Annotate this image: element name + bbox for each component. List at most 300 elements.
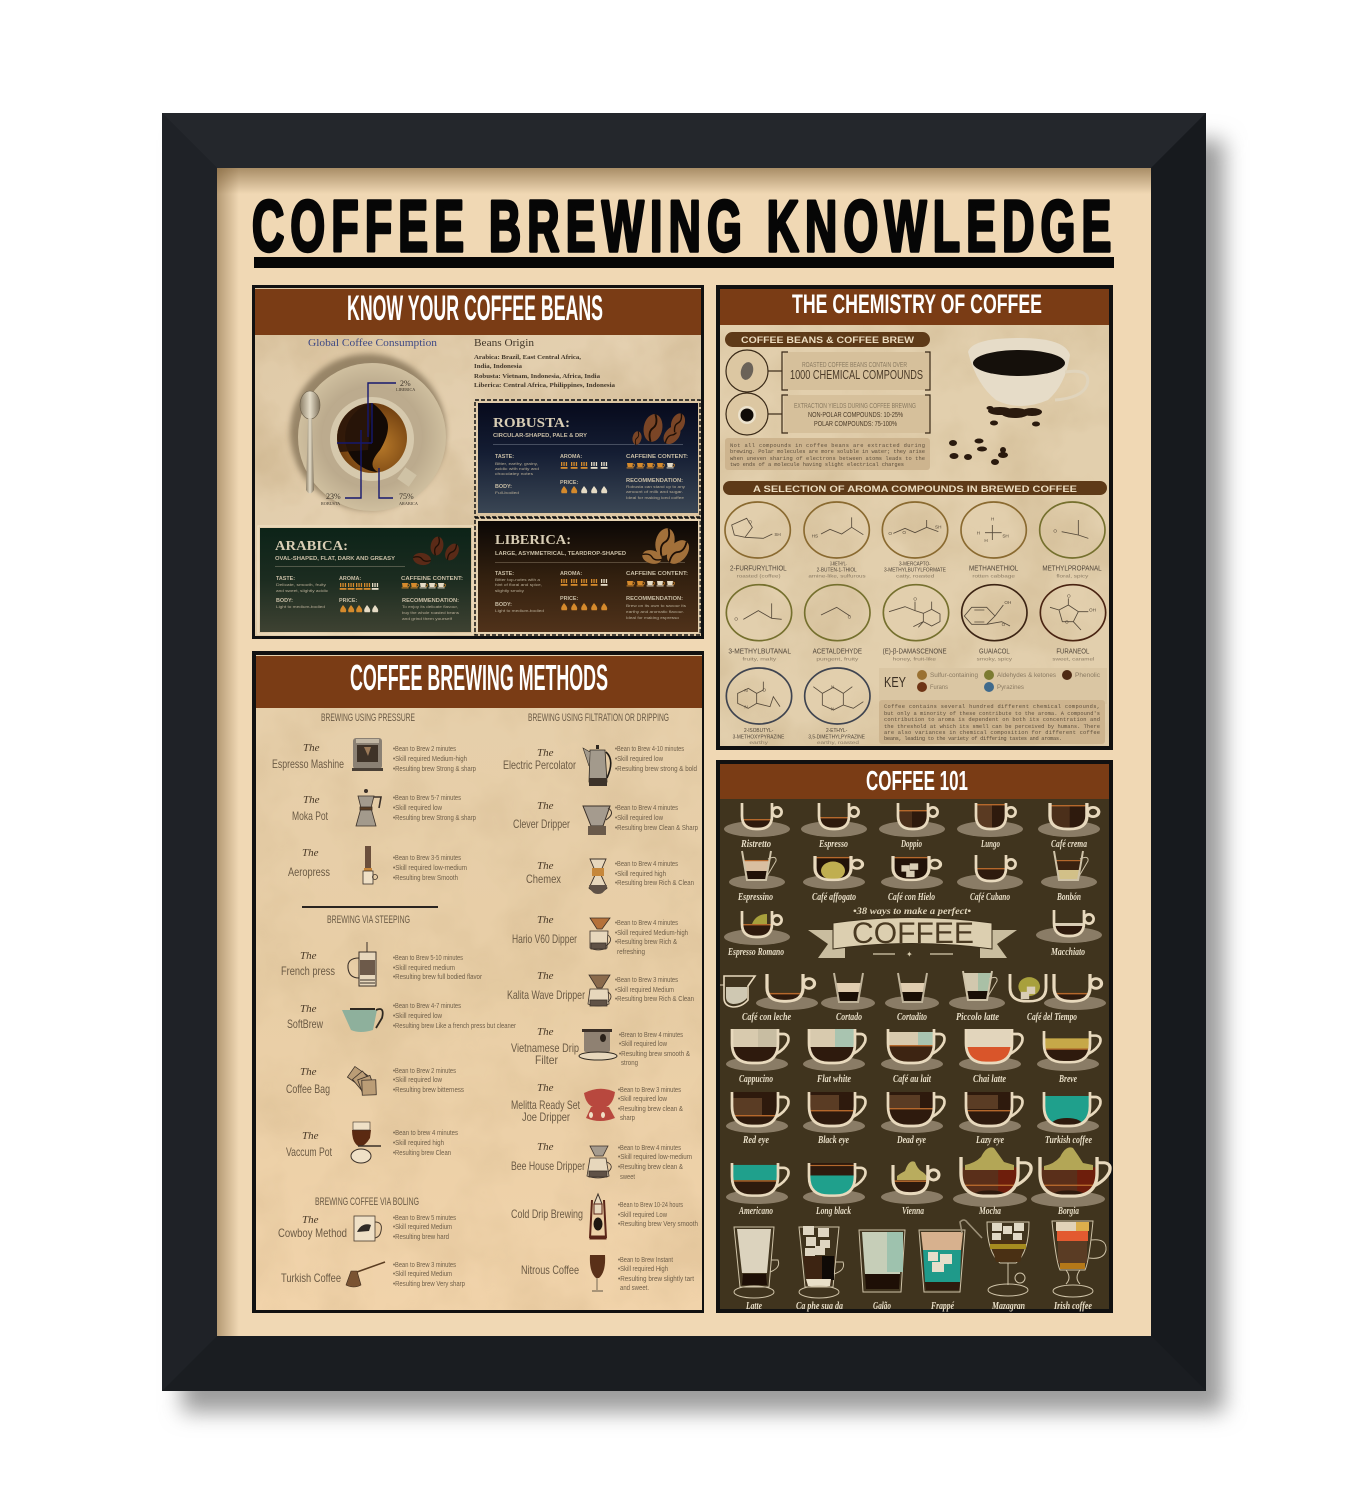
labels row 2	[737, 892, 1081, 903]
chart: coffee cup consumption: LIBERICA	[396, 387, 415, 392]
method: french press: •Bean to Brew 5-10 minutes	[393, 955, 463, 962]
card: arabica: TASTE:	[276, 576, 295, 582]
heading: filtration: BREWING USING FILTRATION OR DRIPPING	[528, 712, 669, 724]
pill heading: coffee beans and brew	[725, 332, 930, 347]
text block: beans origin	[474, 338, 615, 389]
callout: extraction yields	[726, 393, 930, 435]
chart: aroma compound molecules: GUAIACOL	[979, 647, 1010, 656]
banner: 38 ways to make a perfect coffee: COFFEE	[852, 917, 974, 950]
chart: aroma compound molecules: rotten cabbage	[972, 573, 1016, 578]
labels row 6	[742, 1135, 1092, 1146]
cup row 5	[726, 1029, 1100, 1071]
card: robusta: amount of milk and sugar.	[626, 490, 683, 494]
method: softbrew: •Resulting brew Like a french press but cleaner	[393, 1023, 517, 1030]
method: french press: •Skill required medium	[393, 965, 455, 972]
labels row 2: Espressino	[737, 892, 773, 903]
chart: aroma compound molecules: fruity, malty	[742, 657, 778, 662]
chart: aroma compound molecules: OH	[1089, 608, 1096, 613]
method: clever dripper: The	[537, 800, 554, 812]
heading: global coffee consumption: Global Coffee Consumption	[308, 338, 438, 349]
method: electric percolator: •Skill required low	[615, 756, 664, 763]
labels row 7	[738, 1206, 1079, 1217]
card: robusta: acidic with nutty and	[495, 467, 539, 471]
panel header: chemistry	[720, 289, 1109, 325]
card: robusta: CIRCULAR-SHAPED, PALE & DRY	[493, 433, 587, 439]
text block: aroma note	[879, 700, 1105, 744]
card: robusta: CAFFEINE CONTENT:	[626, 454, 688, 460]
method: electric percolator	[503, 745, 697, 786]
method: vietnamese drip filter: strong	[621, 1060, 638, 1067]
chart: aroma compound molecules: O	[734, 617, 738, 622]
method: clever dripper	[513, 800, 698, 835]
chart: aroma compound molecules: 3-METHYL-	[830, 561, 847, 567]
method: melitta ready set joe dripper: •Bean to Brew 3 minutes	[618, 1087, 681, 1094]
chart: aroma compound molecules: OH	[1004, 600, 1011, 605]
labels row 8: Ca phe sua da	[796, 1301, 843, 1312]
labels row 1	[740, 839, 1087, 850]
panel header: coffee 101	[720, 764, 1109, 799]
method: softbrew: The	[300, 1003, 317, 1015]
text block: beans origin: India, Indonesia	[474, 364, 522, 370]
method: cold drip brewing: •Skill required Low	[618, 1212, 668, 1219]
method: melitta ready set joe dripper: •Resulting brew clean &	[618, 1106, 683, 1113]
labels row 7: Americano	[738, 1206, 773, 1217]
panel: coffee 101	[716, 760, 1113, 1313]
panel header: beans	[255, 289, 701, 335]
chart: aroma compound molecules: 2-ISOBUTYL-	[744, 728, 773, 734]
labels row 1: Doppio	[900, 839, 922, 850]
method: cowboy method: Cowboy Method	[278, 1226, 347, 1240]
method: nitrous coffee: Nitrous Coffee	[521, 1263, 579, 1277]
method: turkish coffee: •Resulting brew Very sharp	[393, 1281, 465, 1288]
heading: pressure: BREWING USING PRESSURE	[321, 712, 415, 724]
chart: aroma compound molecules: ACETALDEHYDE	[813, 647, 862, 656]
labels row 3: Macchiato	[1050, 947, 1085, 958]
legend: key: Aldehydes & ketones	[997, 673, 1056, 679]
method: softbrew: •Skill required low	[393, 1013, 443, 1020]
method: coffee bag: The	[300, 1066, 317, 1078]
chart: aroma compound molecules: catty, roasted	[896, 573, 935, 578]
frame shadow	[182, 140, 1224, 1412]
chart: coffee cup consumption: 23%	[326, 492, 341, 501]
card: robusta: AROMA:	[560, 454, 582, 460]
chart: aroma compound molecules: N	[744, 704, 748, 709]
chart: aroma compound molecules: 2-FURFURYLTHIOL	[730, 563, 787, 572]
method: vaccum pot: •Skill required high	[393, 1140, 444, 1147]
method: hario v60 dipper	[512, 914, 688, 956]
glass: mazagran	[987, 1222, 1029, 1296]
card: liberica: hint of floral and spice,	[495, 583, 542, 587]
chart: aroma compound molecules: METHYLPROPANAL	[1042, 563, 1102, 572]
card: robusta	[475, 400, 700, 517]
panel header: beans: KNOW YOUR COFFEE BEANS	[347, 289, 603, 328]
method: aeropress	[288, 846, 467, 884]
text block: polar molecules	[725, 438, 930, 470]
card: robusta: Robusta can stand up to any	[626, 485, 685, 489]
text block: polar molecules: Not all compounds in coffee beans are extracted during	[730, 443, 925, 449]
method: kalita wave dripper: •Resulting brew Rich & Clean	[615, 996, 694, 1003]
poster background	[217, 168, 1151, 1336]
method: chemex: •Resulting brew Rich & Clean	[615, 880, 694, 887]
card: liberica: TASTE:	[495, 571, 514, 577]
method: bee house dripper: Bee House Dripper	[511, 1159, 585, 1173]
method: coffee bag: •Resulting brew bitterness	[393, 1087, 464, 1094]
card: liberica: CAFFEINE CONTENT:	[626, 571, 688, 577]
chart: aroma compound molecules: N	[831, 685, 834, 690]
legend: key: Phenolic	[1075, 673, 1100, 679]
labels row 4: Piccolo latte	[956, 1012, 999, 1023]
callout: extraction yields: EXTRACTION YIELDS DURING COFFEE BREWING	[794, 401, 916, 410]
method: vietnamese drip filter	[511, 1026, 690, 1067]
labels row 6: Dead eye	[896, 1135, 926, 1146]
icon: arabica beans	[412, 536, 462, 566]
labels row 5: Flat white	[816, 1074, 851, 1085]
chart: aroma compound molecules: 3-METHOXYPYRAZINE	[733, 734, 785, 740]
chart: coffee cup consumption: ARABICA	[399, 501, 418, 506]
chart: aroma compound molecules: earthy	[749, 740, 769, 745]
glass: frappe	[919, 1220, 982, 1292]
method: aeropress: •Resulting brew Smooth	[393, 875, 458, 882]
icon: robusta beans	[631, 411, 688, 447]
method: hario v60 dipper: refreshing	[617, 949, 645, 956]
method: espresso machine: •Skill required Medium-high	[393, 756, 467, 763]
pill heading: aroma compounds	[723, 481, 1107, 495]
chart: aroma compound molecules: O	[913, 597, 917, 602]
card: liberica: BODY:	[495, 602, 512, 608]
method: nitrous coffee: •Resulting brew slightly tart	[618, 1276, 694, 1283]
text block: polar molecules: two ends of a molecule having slight electrical charges	[730, 462, 904, 468]
card: arabica: Delicate, smooth, fruity	[276, 583, 326, 587]
chart: aroma compound molecules: 3-METHYLBUTANAL	[728, 647, 791, 656]
chart: aroma compound molecules: O	[902, 530, 906, 535]
cup row 7	[726, 1147, 1110, 1207]
method: chemex: Chemex	[526, 872, 561, 886]
labels row 1: Espresso	[818, 839, 848, 850]
card: robusta: ROBUSTA:	[493, 416, 570, 431]
chart: coffee cup consumption: 2%	[400, 379, 411, 388]
banner: 38 ways to make a perfect coffee	[808, 907, 1017, 959]
card: liberica: Brew on its own to savour its	[626, 604, 686, 608]
method: moka pot: The	[303, 794, 320, 806]
chart: aroma compound molecules: earthy, roasted	[817, 740, 860, 745]
card: arabica: PRICE:	[339, 598, 357, 604]
labels row 7: Long black	[815, 1206, 851, 1217]
card: liberica: LIBERICA:	[495, 533, 571, 548]
chart: aroma compound molecules: N	[831, 707, 834, 712]
chart: aroma compound molecules: sweet, caramel	[1052, 657, 1094, 662]
method: bee house dripper: •Skill required low-medium	[618, 1154, 692, 1161]
card: arabica: ARABICA:	[275, 539, 348, 554]
icon: liberica beans	[641, 526, 694, 568]
labels row 8: Irish coffee	[1053, 1301, 1092, 1312]
chart: aroma compound molecules: O	[1053, 529, 1057, 534]
chart: aroma compound molecules: SH	[774, 532, 781, 537]
heading: boiling: BREWING COFFEE VIA BOLING	[315, 1196, 419, 1208]
method: moka pot: •Resulting brew Strong & sharp	[393, 815, 476, 822]
method: clever dripper: Clever Dripper	[513, 817, 570, 831]
method: melitta ready set joe dripper	[511, 1082, 683, 1124]
method: aeropress: Aeropress	[288, 865, 330, 879]
text block: beans origin: Liberica: Central Africa, Philippines, Indonesia	[474, 383, 615, 389]
card: liberica	[475, 518, 700, 635]
chart: aroma compound molecules: (E)-β-DAMASCENONE	[883, 647, 947, 656]
method: softbrew: SoftBrew	[287, 1017, 323, 1031]
legend: key: Pyrazines	[997, 685, 1024, 691]
card: arabica: BODY:	[276, 598, 293, 604]
labels row 4: Cortado	[836, 1012, 862, 1023]
labels row 3: Espresso Romano	[727, 947, 784, 958]
labels row 4: Café del Tiempo	[1027, 1012, 1077, 1023]
chart: aroma compound molecules: pungent, fruity	[816, 657, 860, 662]
labels row 2: Café con Hielo	[888, 892, 935, 903]
chart: aroma compound molecules: 3,5-DIMETHYLPYRAZINE	[808, 734, 865, 740]
labels row 8: Latte	[745, 1301, 762, 1312]
card: robusta: Ideal for making iced coffee	[626, 496, 684, 500]
glass: galao	[859, 1230, 905, 1292]
labels row 2: Bonbón	[1056, 892, 1081, 903]
legend: key	[879, 668, 1107, 704]
chart: aroma compound molecules: 3-MERCAPTO-	[899, 561, 931, 567]
method: coffee bag	[286, 1066, 464, 1096]
chart: coffee cup consumption: 75%	[399, 492, 414, 501]
chart: aroma compound molecules: O	[888, 531, 892, 536]
card: robusta: TASTE:	[495, 454, 514, 460]
picture frame	[162, 113, 1206, 1391]
labels row 7: Vienna	[902, 1206, 924, 1217]
panel: coffee brewing methods	[252, 651, 704, 1313]
pill heading: coffee beans and brew: COFFEE BEANS & COFFEE BREW	[741, 335, 915, 345]
glass: ca phe sua da	[799, 1226, 844, 1298]
method: cowboy method: •Resulting brew hard	[393, 1234, 449, 1241]
labels row 1: Café crema	[1051, 839, 1087, 850]
labels row 7: Mocha	[978, 1206, 1001, 1217]
method: nitrous coffee: and sweet.	[620, 1285, 649, 1292]
method: electric percolator: •Bean to Brew 4-10 minutes	[615, 746, 684, 753]
labels row 5	[739, 1074, 1077, 1085]
method: cold drip brewing: •Bean to Brew 10-24 hours	[618, 1202, 683, 1209]
method: vaccum pot: •Bean to brew 4 minutes	[393, 1130, 458, 1137]
method: turkish coffee: •Bean to Brew 3 minutes	[393, 1262, 456, 1269]
text block: polar molecules: brewing. Polar molecules are more soluble in water; they arise	[730, 449, 925, 455]
card: liberica: PRICE:	[560, 596, 578, 602]
method: bee house dripper	[511, 1141, 692, 1181]
method: vietnamese drip filter: Vietnamese Drip	[511, 1041, 579, 1055]
pill heading: aroma compounds: A SELECTION OF AROMA COMPOUNDS IN BREWED COFFEE	[753, 483, 1077, 494]
method: coffee bag: Coffee Bag	[286, 1082, 330, 1096]
method: french press: French press	[281, 964, 335, 978]
text block: polar molecules: when uneven sharing of electrons between atoms leads to the	[730, 456, 925, 462]
chart: aroma compound molecules: H	[977, 531, 980, 536]
method: chemex: The	[537, 860, 554, 872]
method: melitta ready set joe dripper: sharp	[620, 1115, 635, 1122]
banner: 38 ways to make a perfect coffee: ✦	[906, 950, 913, 959]
card: liberica: Light to medium-bodied	[495, 609, 544, 613]
chart: aroma compound molecules: H	[984, 538, 988, 543]
chart: aroma compound molecules: O	[1065, 619, 1069, 624]
method: coffee bag: •Bean to Brew 2 minutes	[393, 1068, 456, 1075]
card: arabica: To enjoy its delicate flavour,	[402, 605, 458, 609]
text block: beans origin: Arabica: Brazil, East Central Africa,	[474, 355, 582, 361]
card: arabica: AROMA:	[339, 576, 361, 582]
method: cold drip brewing: •Resulting brew Very smooth	[618, 1221, 698, 1228]
labels row 8: Frappé	[930, 1301, 954, 1312]
method: hario v60 dipper: The	[537, 914, 554, 926]
labels row 2: Café affogato	[812, 892, 856, 903]
text block: aroma note: the threshold at which its smell can be perceived by humans. There	[884, 724, 1100, 730]
card: robusta: RECOMMENDATION:	[626, 478, 683, 484]
chart: aroma compound molecules: 3-METHYLBUTYLFORMATE	[884, 568, 946, 574]
chart: aroma compound molecules: O	[1067, 593, 1071, 598]
method: vietnamese drip filter: The	[537, 1026, 554, 1038]
labels row 6: Lazy eye	[975, 1135, 1004, 1146]
method: cowboy method: The	[302, 1214, 319, 1226]
labels row 6: Red eye	[742, 1135, 769, 1146]
method: espresso machine	[272, 738, 476, 773]
labels row 7: Borgia	[1057, 1206, 1079, 1217]
cup row 1	[724, 803, 1100, 837]
card: robusta: Bitter, earthy, grainy,	[495, 462, 538, 466]
method: aeropress: •Skill required low-medium	[393, 865, 467, 872]
chart: aroma compound molecules: O	[762, 688, 766, 693]
panel header: coffee 101: COFFEE 101	[866, 765, 968, 796]
card: robusta: Full-bodied	[495, 491, 519, 495]
method: kalita wave dripper: The	[537, 970, 554, 982]
method: softbrew: •Bean to Brew 4-7 minutes	[393, 1003, 461, 1010]
card: liberica: Ideal for making espresso	[626, 616, 679, 620]
cup row 3	[724, 910, 1102, 945]
method: electric percolator: Electric Percolator	[503, 758, 576, 772]
method: vaccum pot: The	[302, 1130, 319, 1142]
method: vietnamese drip filter: •Skill required low	[619, 1041, 668, 1048]
labels row 1: Lungo	[980, 839, 1000, 850]
chart: aroma compound molecules: O	[748, 519, 752, 524]
card: liberica: LARGE, ASYMMETRICAL, TEARDROP-SHAPED	[495, 551, 626, 557]
method: clever dripper: •Bean to Brew 4 minutes	[615, 805, 678, 812]
chart: aroma compound molecules: roasted (coffee)	[737, 573, 781, 578]
cup row 6	[726, 1092, 1100, 1133]
cup: vienna	[893, 1161, 939, 1196]
method: clever dripper: •Resulting brew Clean & Sharp	[615, 825, 698, 832]
method: espresso machine: Espresso Mashine	[272, 757, 344, 771]
text block: aroma note: contribution to aroma is dependent on both its concentration and	[884, 717, 1100, 723]
method: kalita wave dripper: •Bean to Brew 3 minutes	[615, 977, 678, 984]
chart: aroma compound molecules: SH	[1002, 534, 1009, 539]
legend: key: KEY	[884, 674, 906, 691]
method: espresso machine: •Resulting brew Strong & sharp	[393, 766, 476, 773]
labels row 6: Turkish coffee	[1045, 1135, 1092, 1146]
cup: borgia	[1040, 1147, 1110, 1202]
method: cold drip brewing: Cold Drip Brewing	[511, 1207, 583, 1221]
card: arabica: and grind them yourself	[402, 617, 452, 621]
method: bee house dripper: •Bean to Brew 4 minutes	[618, 1145, 681, 1152]
text block: beans origin: Robusta: Vietnam, Indonesia, Africa, India	[474, 374, 600, 380]
panel header: chemistry: THE CHEMISTRY OF COFFEE	[792, 289, 1042, 319]
method: moka pot: •Bean to Brew 5-7 minutes	[393, 795, 461, 802]
method: hario v60 dipper: •Bean to Brew 4 minutes	[615, 920, 678, 927]
method: aeropress: The	[302, 847, 319, 859]
labels row 8: Galão	[873, 1301, 891, 1312]
method: melitta ready set joe dripper: •Skill required low	[618, 1096, 668, 1103]
card: arabica: Light to medium-bodied	[276, 605, 325, 609]
labels row 5: Café au lait	[893, 1074, 932, 1085]
labels row 6: Black eye	[817, 1135, 849, 1146]
method: hario v60 dipper: •Resulting brew Rich &	[615, 939, 677, 946]
chart: aroma compound molecules: SH	[935, 524, 941, 529]
method: espresso machine: The	[303, 742, 320, 754]
method: cold drip brewing	[511, 1194, 698, 1239]
panel: the chemistry of coffee	[716, 285, 1113, 750]
method: french press: •Resulting brew full bodied flavor	[393, 974, 483, 981]
method: melitta ready set joe dripper: Joe Dripper	[522, 1110, 570, 1124]
method: nitrous coffee	[521, 1255, 694, 1292]
labels row 1: Ristretto	[740, 839, 771, 850]
method: kalita wave dripper	[507, 970, 694, 1006]
method: chemex: •Bean to Brew 4 minutes	[615, 861, 678, 868]
glass: irish coffee	[1052, 1221, 1106, 1297]
text block: aroma note: but only a minority of these contribute to the aroma. A compound's	[884, 711, 1100, 717]
card: arabica: buy the whole roasted beans	[402, 611, 459, 615]
chart: aroma compound molecules: O	[1002, 622, 1006, 627]
heading: steeping: BREWING VIA STEEPING	[327, 914, 410, 926]
title: COFFEE BREWING KNOWLEDGE	[252, 186, 1111, 267]
method: moka pot	[292, 789, 476, 826]
method: turkish coffee	[281, 1262, 465, 1288]
callout: extraction yields: NON-POLAR COMPOUNDS: 10-25%	[808, 410, 903, 419]
labels row 8: Mazagran	[991, 1301, 1025, 1312]
method: bee house dripper: •Resulting brew clean &	[618, 1164, 683, 1171]
chart: aroma compound molecules: O	[848, 615, 852, 620]
card: arabica: RECOMMENDATION:	[402, 598, 459, 604]
labels row 4: Cortadito	[897, 1012, 927, 1023]
method: cowboy method: •Skill required Medium	[393, 1224, 452, 1231]
callout: roasted beans compounds: ROASTED COFFEE BEANS CONTAIN OVER	[802, 360, 907, 369]
method: chemex	[526, 859, 694, 894]
method: french press: The	[300, 950, 317, 962]
method: moka pot: Moka Pot	[292, 809, 328, 823]
card: robusta: PRICE:	[560, 480, 578, 486]
glass: latte	[734, 1227, 779, 1298]
callout: extraction yields: POLAR COMPOUNDS: 75-100%	[814, 419, 897, 428]
method: hario v60 dipper: •Skill required Medium-high	[615, 930, 688, 937]
method: nitrous coffee: •Skill required High	[618, 1266, 668, 1273]
glasses row 8	[734, 1220, 1106, 1298]
chart: aroma compound molecules: H	[991, 517, 994, 522]
method: vietnamese drip filter: •Brean to Brew 4 minutes	[619, 1032, 683, 1039]
text block: aroma note: Coffee contains several hundred different chemical compounds,	[884, 704, 1100, 710]
labels row 5: Breve	[1058, 1074, 1077, 1085]
panel: know your coffee beans	[252, 285, 704, 639]
cup row 4	[720, 971, 1106, 1010]
legend: key: Furans	[930, 685, 948, 691]
cup: mocha	[961, 1147, 1031, 1202]
panel header: methods	[256, 656, 702, 708]
card: liberica: earthy and aromatic flavour.	[626, 610, 684, 614]
chart: aroma compound molecules: amine-like, sulfurous	[808, 573, 866, 578]
method: vietnamese drip filter: Filter	[535, 1053, 558, 1067]
method: bee house dripper: sweet	[620, 1174, 635, 1181]
image: white coffee cup with beans	[949, 338, 1088, 465]
chart: aroma compound molecules: HS	[812, 533, 818, 538]
card: liberica: slightly smoky	[495, 589, 524, 593]
method: french press	[281, 942, 483, 986]
labels row 5: Chai latte	[973, 1074, 1006, 1085]
chart: coffee cup consumption: ROBUSTA	[321, 501, 340, 506]
method: turkish coffee: Turkish Coffee	[281, 1271, 341, 1285]
method: electric percolator: The	[537, 747, 554, 759]
method: turkish coffee: •Skill required Medium	[393, 1271, 452, 1278]
card: liberica: AROMA:	[560, 571, 582, 577]
labels row 4	[742, 1012, 1077, 1023]
